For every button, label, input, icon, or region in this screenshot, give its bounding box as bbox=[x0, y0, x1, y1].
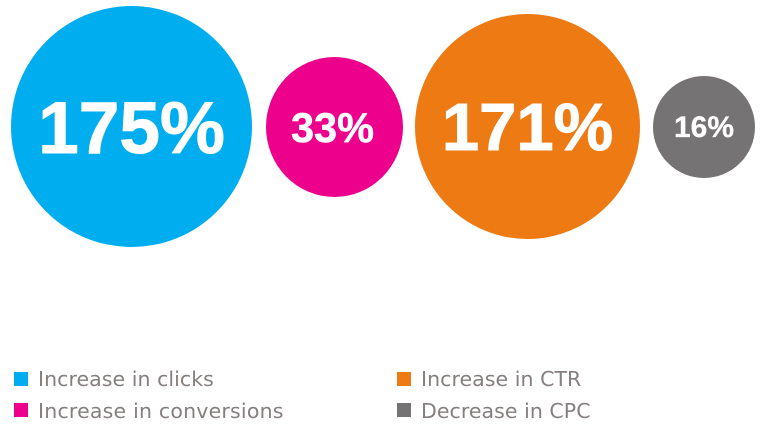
circle: 171% increase in CTR bbox=[415, 14, 640, 239]
legend label: CPC: Decrease in CPC bbox=[421, 399, 591, 423]
legend swatch: conversions bbox=[14, 403, 28, 417]
circle: 33% increase in conversions bbox=[266, 57, 403, 197]
legend swatch: clicks bbox=[14, 372, 28, 386]
circle: 175% increase in clicks: 175% bbox=[38, 88, 225, 168]
circle: 33% increase in conversions: 33% bbox=[291, 104, 374, 150]
circle: 16% decrease in CPC bbox=[653, 76, 755, 178]
legend swatch: CTR bbox=[397, 372, 411, 386]
legend label: clicks: Increase in clicks bbox=[38, 367, 214, 391]
circle: 171% increase in CTR: 171% bbox=[442, 90, 613, 165]
legend label: CTR: Increase in CTR bbox=[421, 367, 581, 391]
legend label: conversions: Increase in conversions bbox=[38, 399, 284, 423]
circle: 175% increase in clicks bbox=[11, 6, 252, 247]
legend swatch: CPC bbox=[397, 403, 411, 417]
circle: 16% decrease in CPC: 16% bbox=[674, 111, 734, 144]
